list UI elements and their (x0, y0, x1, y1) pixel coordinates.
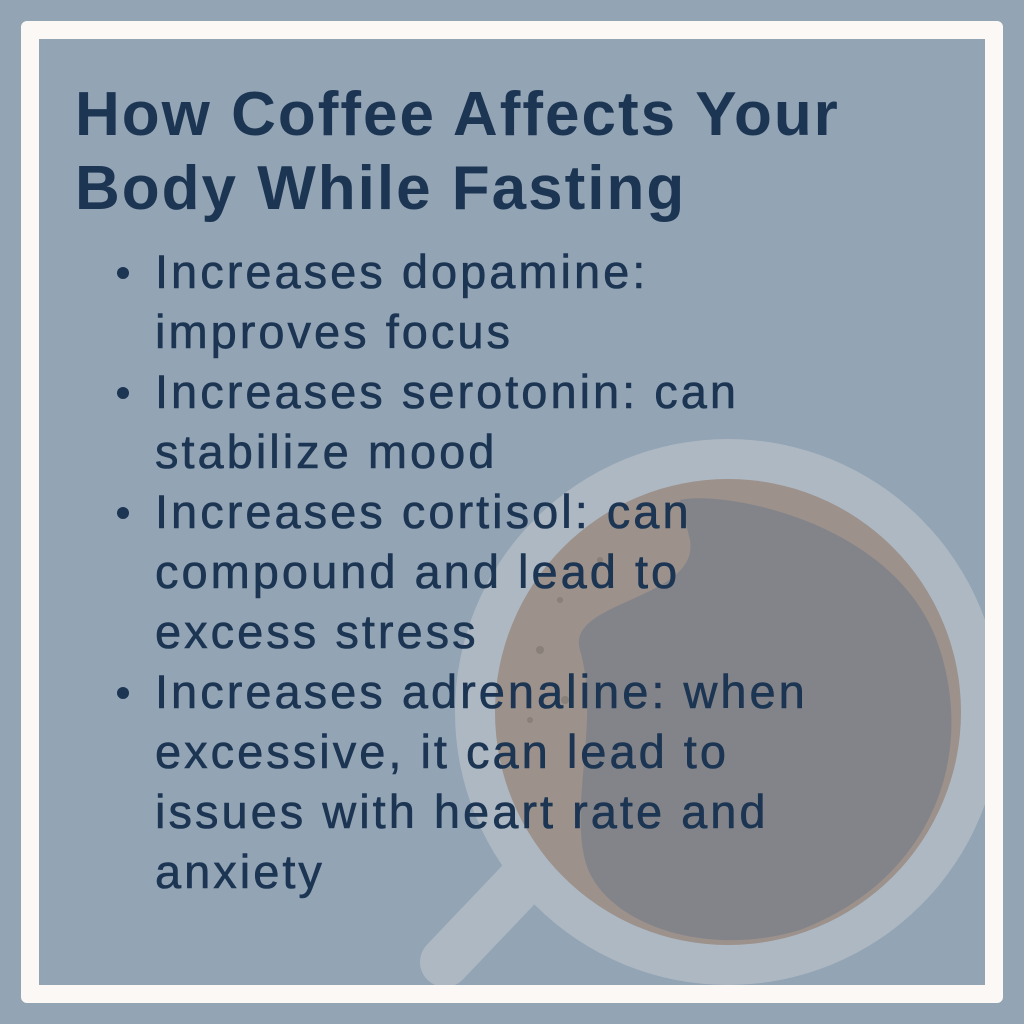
bullet list: anxiety (155, 845, 325, 898)
bullet list: stabilize mood (155, 425, 497, 478)
bullet list: Increases dopamine: (155, 245, 648, 298)
title (75, 80, 840, 223)
title: Body While Fasting (75, 154, 686, 223)
bullet list: Increases serotonin: can (155, 365, 739, 418)
bullet list: compound and lead to (155, 545, 680, 598)
bullet list: improves focus (155, 305, 513, 358)
bullet list: issues with heart rate and (155, 785, 769, 838)
title: How Coffee Affects Your (75, 80, 840, 149)
bullet list: excess stress (155, 605, 479, 658)
bullet list: Increases cortisol: can (155, 485, 692, 538)
bullet list: Increases adrenaline: when (155, 665, 808, 718)
bullet list: excessive, it can lead to (155, 725, 729, 778)
bullet list (117, 245, 808, 898)
